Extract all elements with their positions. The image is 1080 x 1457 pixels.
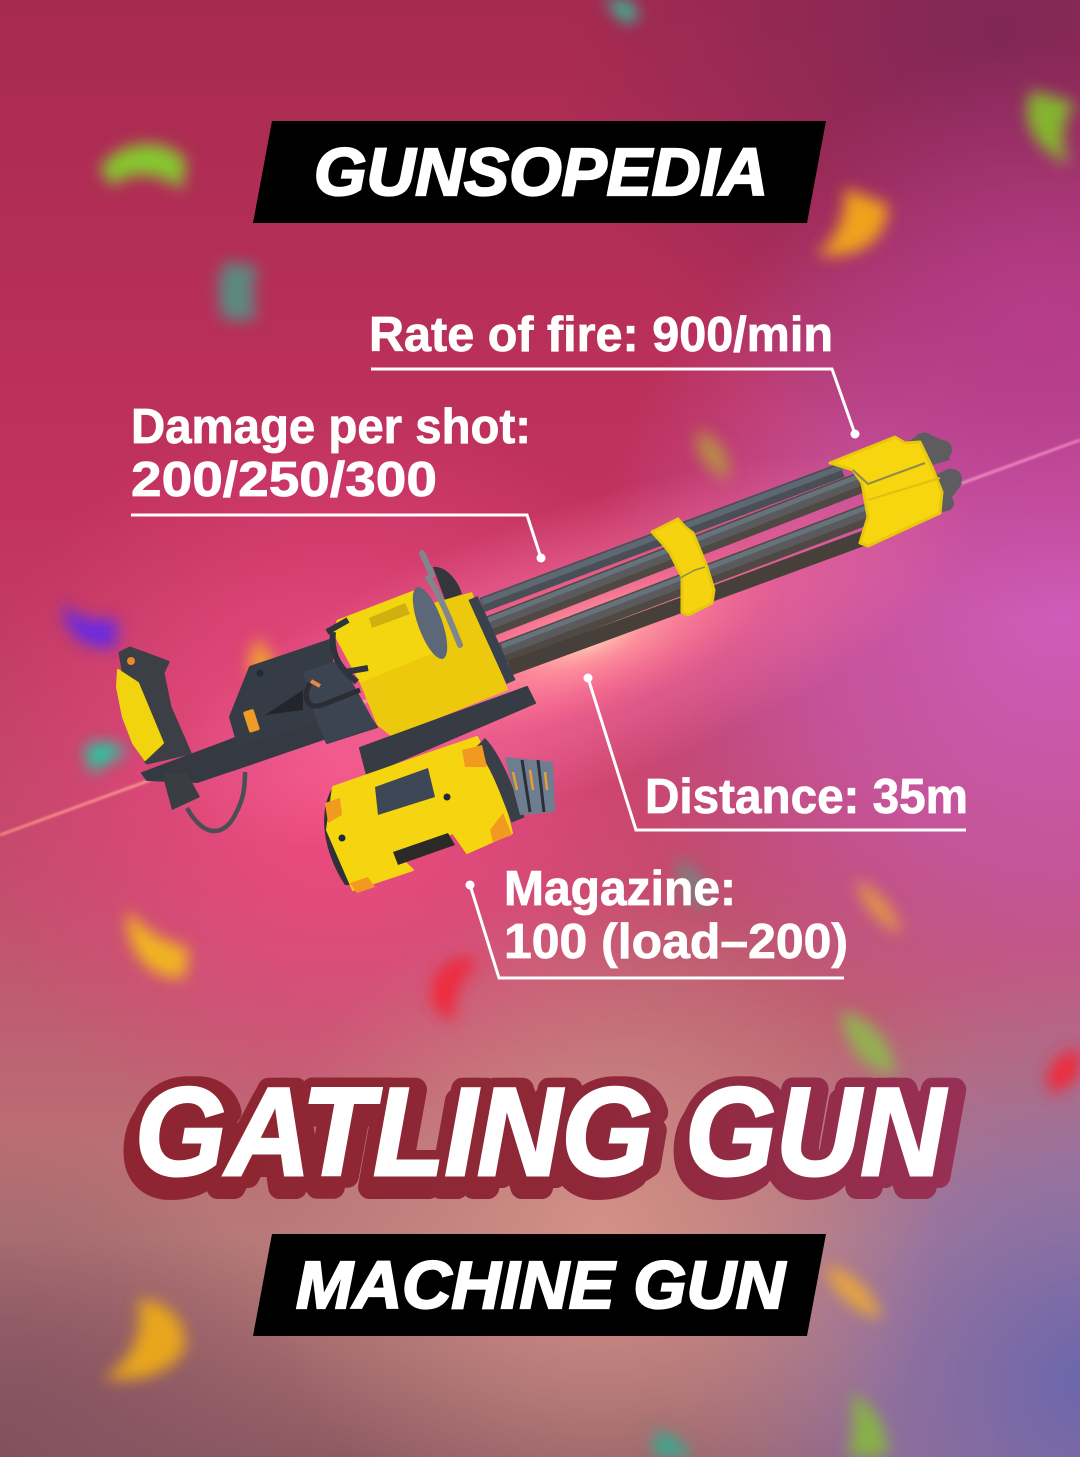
ammo belt <box>480 743 518 820</box>
barrels <box>482 467 873 668</box>
callout: magazine: Magazine: <box>504 862 736 916</box>
front barrel housing <box>830 437 942 546</box>
top banner: GUNSOPEDIA: GUNSOPEDIA <box>314 135 768 210</box>
title: GATLING GUN: GATLING GUN <box>135 1063 948 1202</box>
magazine drum <box>324 787 360 885</box>
orange clips <box>325 745 512 893</box>
bottom banner: MACHINE GUN <box>253 1234 826 1336</box>
callout: rate of fire: Rate of fire: 900/min <box>369 308 833 362</box>
title: GATLING GUN: GATLING GUN <box>143 1064 956 1203</box>
top banner: GUNSOPEDIA <box>253 121 826 223</box>
lower tube <box>360 687 535 775</box>
bottom banner: MACHINE GUN: MACHINE GUN <box>296 1248 787 1323</box>
rear receiver <box>230 640 377 745</box>
carrying handle ring <box>422 553 460 645</box>
gatling gun illustration <box>117 432 962 893</box>
title: GATLING GUN: GATLING GUN <box>129 1075 942 1214</box>
muzzles <box>905 432 962 512</box>
grip base and cable <box>162 773 200 810</box>
callout: damage per shot: Damage per shot: <box>131 400 531 454</box>
middle barrel clamp <box>652 519 714 615</box>
callout: magazine: 100 (load–200) <box>504 915 848 969</box>
callout: damage per shot <box>131 400 546 562</box>
title: GATLING GUN: GATLING GUN <box>135 1064 948 1203</box>
grip <box>120 648 190 763</box>
callout: distance <box>584 674 968 830</box>
callout: damage per shot: 200/250/300 <box>131 453 437 507</box>
stock <box>142 700 335 782</box>
callout: rate of fire <box>369 308 860 438</box>
callout: distance: Distance: 35m <box>645 770 968 824</box>
callout: magazine <box>466 862 848 978</box>
main yellow drum <box>333 590 508 737</box>
dark ring behind handle <box>433 567 462 600</box>
